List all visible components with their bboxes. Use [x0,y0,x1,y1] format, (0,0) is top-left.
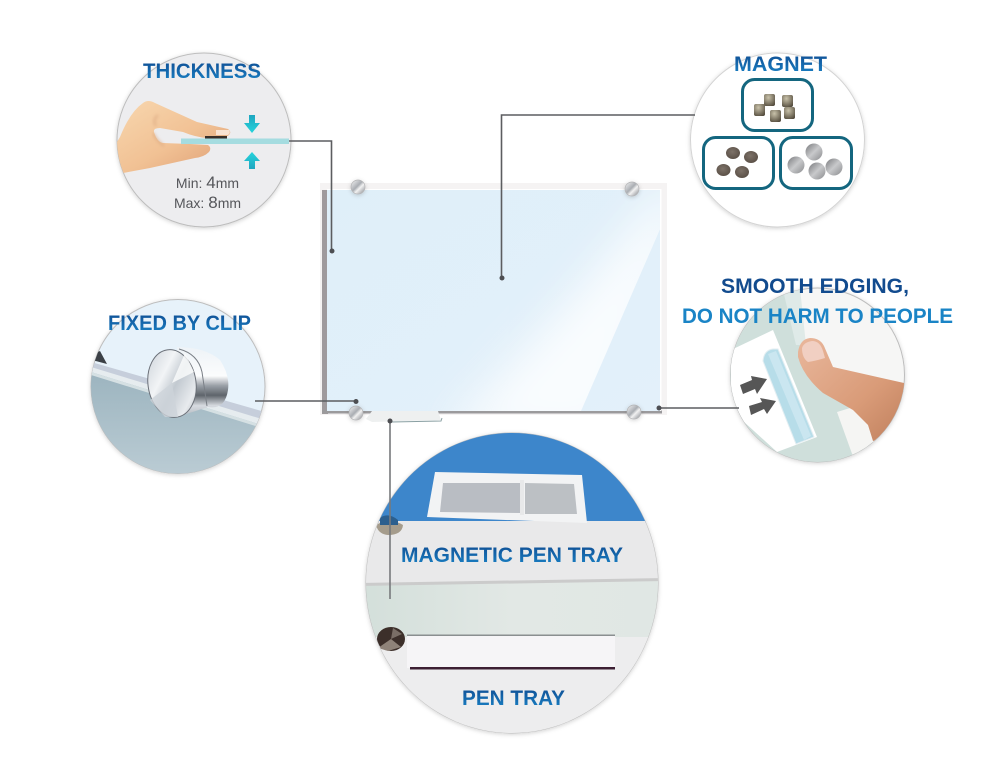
arrow up [244,152,260,169]
heading: fixed by clip: FIXED BY CLIP [108,312,251,335]
panel: smooth edging [720,288,906,470]
magnetic tray upper area [378,433,646,523]
max thickness: Max: 8mm [174,193,241,212]
connector: smooth edging [656,406,739,410]
panel: thickness [112,53,291,227]
frame: cube magnets [742,80,812,130]
label: pen tray: PEN TRAY [462,687,565,710]
pen tray on board [366,411,442,422]
min thickness: Min: 4mm [176,173,239,192]
heading: smooth edging: SMOOTH EDGING, [721,275,909,298]
heading: magnet: MAGNET [734,53,827,76]
glass board [320,179,667,423]
rounded edge highlight [763,349,814,444]
magnetic tray box [427,472,587,523]
panel: magnet [690,53,864,227]
panel: pen trays [360,430,665,737]
connector: clip [255,399,358,404]
frame: cylinder magnets [780,138,852,188]
knob lower [377,627,405,651]
heading: do not harm: DO NOT HARM TO PEOPLE [682,305,953,328]
frame: disc magnets [704,138,774,188]
icon: arrows [740,376,776,415]
icon: hand [112,101,230,174]
icon: thumb [798,338,906,441]
label: magnetic pen tray: MAGNETIC PEN TRAY [401,544,623,567]
icon: clip knob [144,346,228,421]
lower pen tray [407,634,615,670]
clips on board [349,180,641,420]
connector: magnet [500,115,695,280]
knob upper [376,515,403,535]
connector: thickness [289,141,334,254]
panel: fixed by clip [91,300,265,480]
arrow down [244,115,260,133]
connector: pen tray [388,418,392,599]
heading: thickness: THICKNESS [143,60,261,83]
glass edge strip [181,138,289,144]
